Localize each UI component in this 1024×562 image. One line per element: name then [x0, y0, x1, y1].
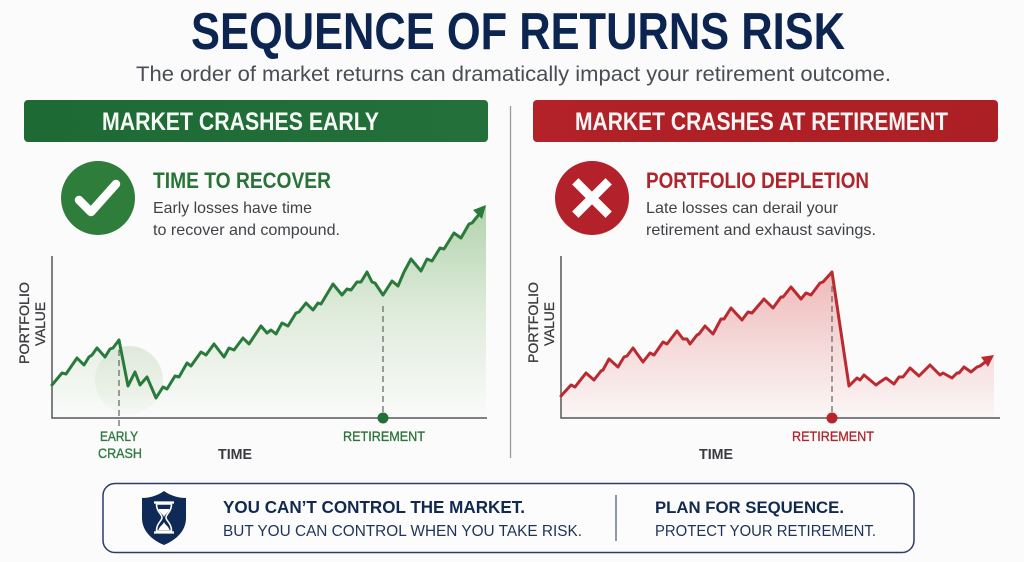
- text: plan for sequence: PROTECT YOUR RETIREMENT.: [655, 523, 876, 540]
- x axis label: time: TIME: [699, 446, 733, 463]
- text: you can't control the market: [223, 497, 582, 540]
- arrowhead: green: [473, 205, 486, 219]
- text: plan for sequence: PLAN FOR SEQUENCE.: [655, 498, 844, 517]
- y axis label: portfolio value: VALUE: [32, 302, 48, 346]
- y axis label: portfolio value: [525, 282, 557, 363]
- retirement dot: [378, 412, 388, 424]
- center divider: [510, 106, 512, 458]
- area fill: red: [561, 272, 994, 418]
- panel: market crashes early: [16, 100, 488, 463]
- callout: bottom message box: [103, 484, 914, 552]
- dashed marker: retirement: [831, 286, 833, 414]
- x axis label: early crash: [98, 428, 142, 461]
- dashed marker: early crash: [118, 350, 120, 426]
- text: you can't control the market: BUT YOU CAN CONTROL WHEN YOU TAKE RISK.: [223, 523, 582, 540]
- text: late losses description: Late losses can derail your: [646, 200, 839, 217]
- y axis label: portfolio value: [16, 282, 48, 364]
- heading: portfolio depletion: PORTFOLIO DEPLETION: [646, 168, 869, 193]
- text: plan for sequence: [655, 498, 876, 540]
- panel: market crashes at retirement: [525, 100, 1000, 463]
- panel header: market crashes early: MARKET CRASHES EARLY: [102, 108, 379, 136]
- data line: red: [561, 272, 988, 396]
- panel header: market crashes at retirement: MARKET CRASHES AT RETIREMENT: [575, 108, 948, 136]
- text: early losses description: to recover and compound.: [153, 222, 340, 239]
- x axis label: early crash: CRASH: [98, 445, 142, 461]
- dashed marker: retirement: [382, 306, 384, 414]
- icon: x mark: [555, 161, 629, 235]
- y axis label: portfolio value: VALUE: [541, 302, 557, 346]
- text: late losses description: retirement and exhaust savings.: [646, 222, 876, 239]
- title: SEQUENCE OF RETURNS RISK: [191, 3, 845, 61]
- arrowhead: red: [981, 355, 994, 367]
- y axis label: portfolio value: PORTFOLIO: [16, 282, 32, 364]
- x axis label: early crash: EARLY: [100, 428, 139, 444]
- x axis label: time: TIME: [218, 446, 252, 463]
- text: early losses description: [153, 200, 340, 239]
- text: early losses description: Early losses have time: [153, 200, 312, 217]
- panel header: market crashes at retirement: [533, 100, 998, 142]
- axes: [52, 256, 487, 418]
- text: late losses description: [646, 200, 876, 239]
- panel header: market crashes early: [24, 100, 488, 142]
- subtitle: The order of market returns can dramatically impact your retirement outcome.: [136, 63, 891, 86]
- early crash highlight circle: [95, 346, 163, 414]
- y axis label: portfolio value: PORTFOLIO: [525, 282, 541, 363]
- axes: [561, 256, 1000, 418]
- retirement dot: [826, 412, 838, 424]
- x axis label: retirement: RETIREMENT: [343, 428, 425, 444]
- icon: check mark: [61, 161, 135, 235]
- area fill: green: [52, 206, 486, 418]
- heading: time to recover: TIME TO RECOVER: [153, 168, 331, 193]
- x axis label: retirement: RETIREMENT: [792, 428, 874, 444]
- data line: green: [52, 212, 481, 398]
- icon: shield with hourglass: [142, 491, 186, 545]
- line chart: crash at retirement portfolio value: [561, 256, 1000, 424]
- line chart: early crash portfolio value: [52, 205, 487, 426]
- text: you can't control the market: YOU CAN’T CONTROL THE MARKET.: [223, 497, 525, 517]
